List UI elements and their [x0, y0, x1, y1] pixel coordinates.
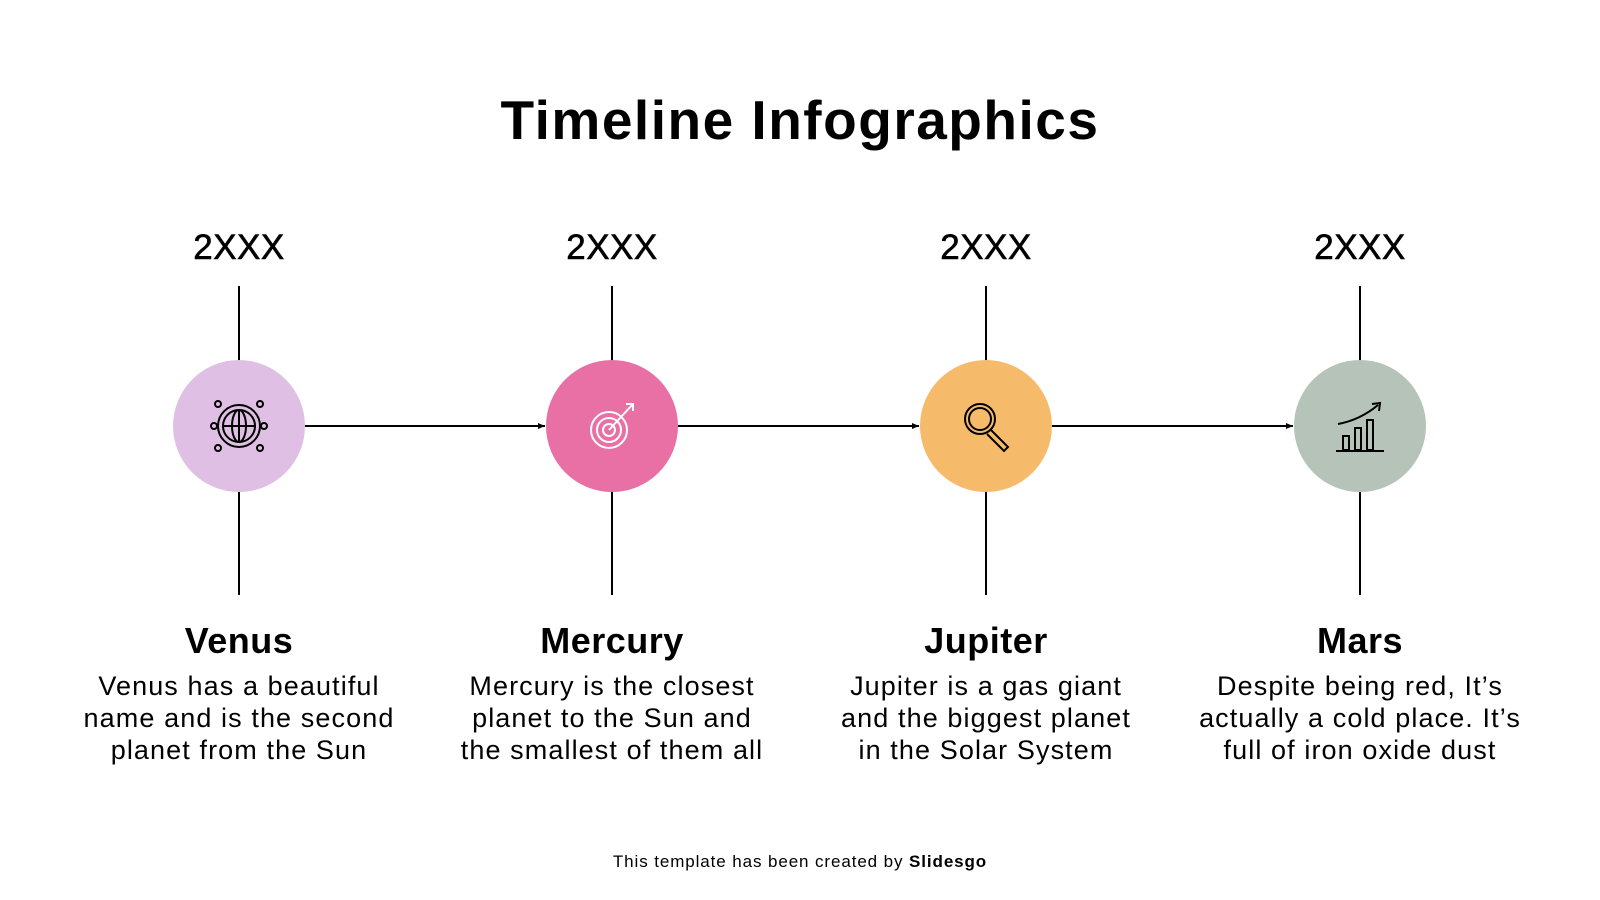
text: 2XXX — [940, 228, 1032, 267]
text: Jupiter is a gas giant — [850, 671, 1122, 701]
text: planet to the Sun and — [472, 703, 752, 733]
text: full of iron oxide dust — [1224, 735, 1496, 765]
text: actually a cold place. It’s — [1199, 703, 1521, 733]
circle: mars chart — [1294, 360, 1426, 492]
circle: venus globe — [173, 360, 305, 492]
circle: mercury target — [546, 360, 678, 492]
text: 2XXX — [566, 228, 658, 267]
circle: jupiter magnifier — [920, 360, 1052, 492]
descriptions: Venus has a beautiful — [98, 671, 380, 701]
text: Mercury — [540, 620, 684, 661]
text: Jupiter — [924, 620, 1048, 661]
text: Mercury is the closest — [469, 671, 755, 701]
text: Despite being red, It’s — [1217, 671, 1503, 701]
years: 2XXX — [193, 228, 285, 267]
text: Mars — [1317, 620, 1403, 661]
text: in the Solar System — [858, 735, 1114, 765]
descriptions: planet from the Sun — [111, 735, 367, 765]
descriptions: name and is the second — [84, 703, 394, 733]
text: 2XXX — [1314, 228, 1406, 267]
names: Venus — [185, 620, 293, 661]
title: Timeline Infographics — [501, 89, 1099, 151]
text: and the biggest planet — [841, 703, 1131, 733]
descriptions — [84, 671, 394, 765]
text: the smallest of them all — [461, 735, 763, 765]
footer: This template has been created by Slidesgo — [613, 852, 987, 871]
arrows — [305, 425, 1293, 427]
